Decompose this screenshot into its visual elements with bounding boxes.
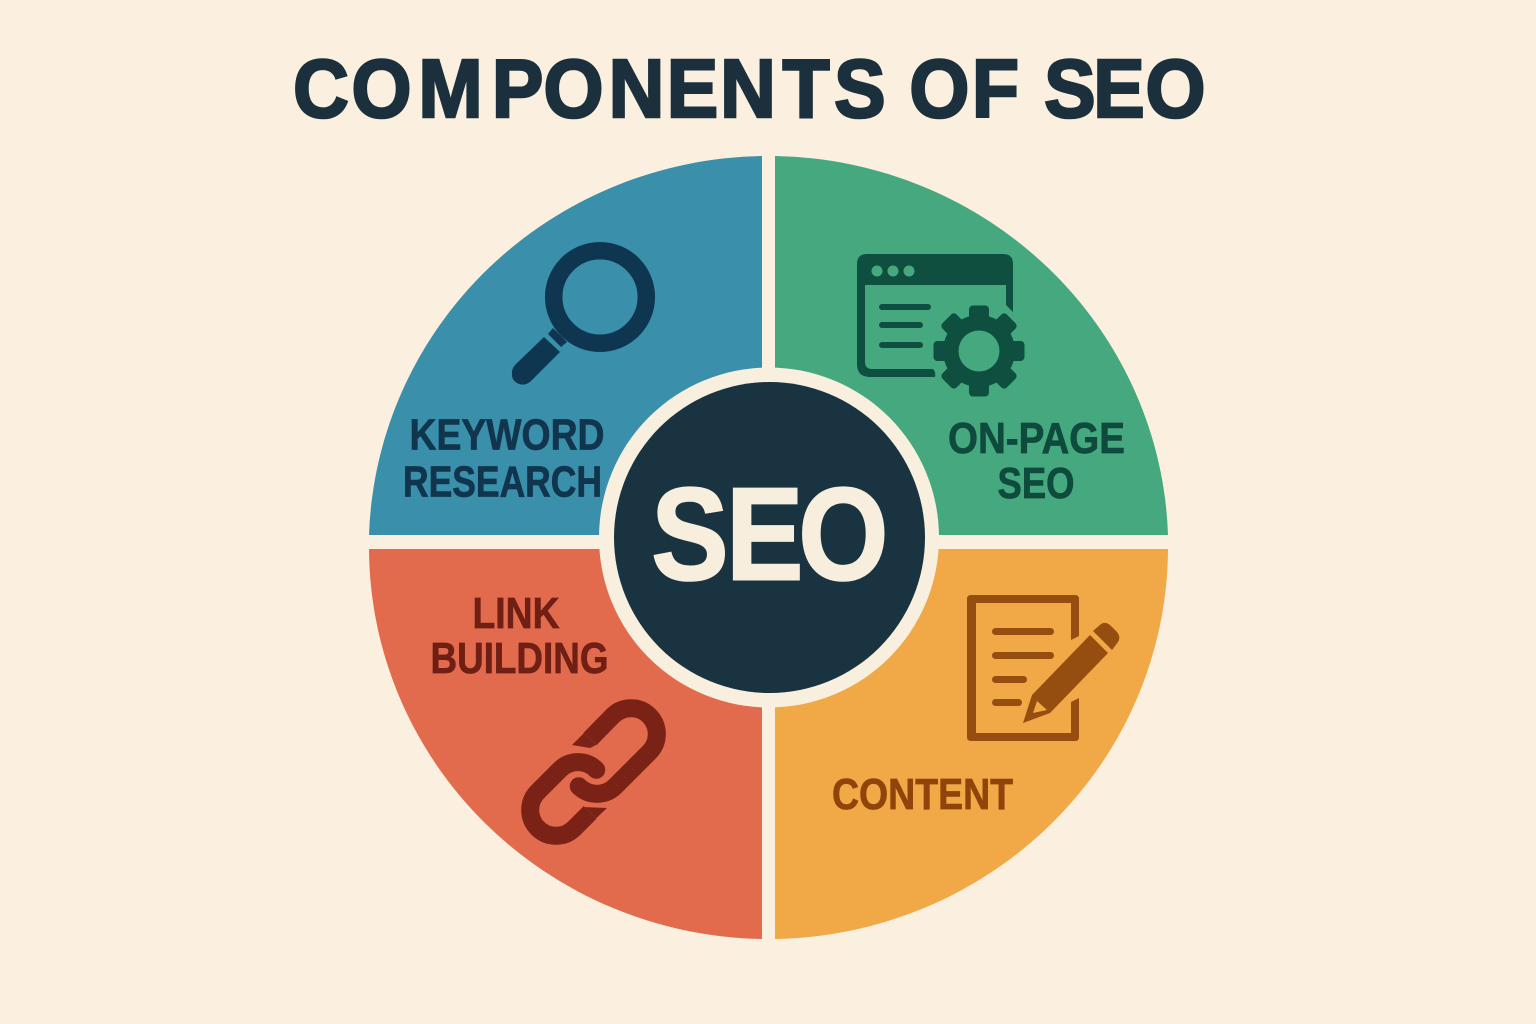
- icon: document with pencil: [967, 595, 1119, 741]
- center circle: seo: SEO: [651, 461, 889, 608]
- panel: link building: [369, 549, 762, 939]
- label: on-page seo: SEO: [998, 459, 1074, 508]
- icon: chain link: [530, 708, 657, 836]
- panel: on-page seo: [775, 156, 1168, 535]
- panel: content: [775, 549, 1168, 939]
- label: content: CONTENT: [832, 770, 1013, 819]
- label: keyword research: KEYWORD: [410, 410, 604, 460]
- icon: magnifying glass: [512, 251, 646, 385]
- label: keyword research: RESEARCH: [403, 458, 602, 506]
- center circle: seo: [599, 368, 939, 708]
- panel: keyword research: [369, 156, 762, 535]
- icon: browser window with gear: [857, 254, 1024, 396]
- label: on-page seo: ON-PAGE: [948, 414, 1125, 463]
- label: link building: LINK: [472, 589, 560, 638]
- label: link building: BUILDING: [430, 634, 608, 683]
- title: COMPONENTS OF SEO: [293, 42, 1206, 135]
